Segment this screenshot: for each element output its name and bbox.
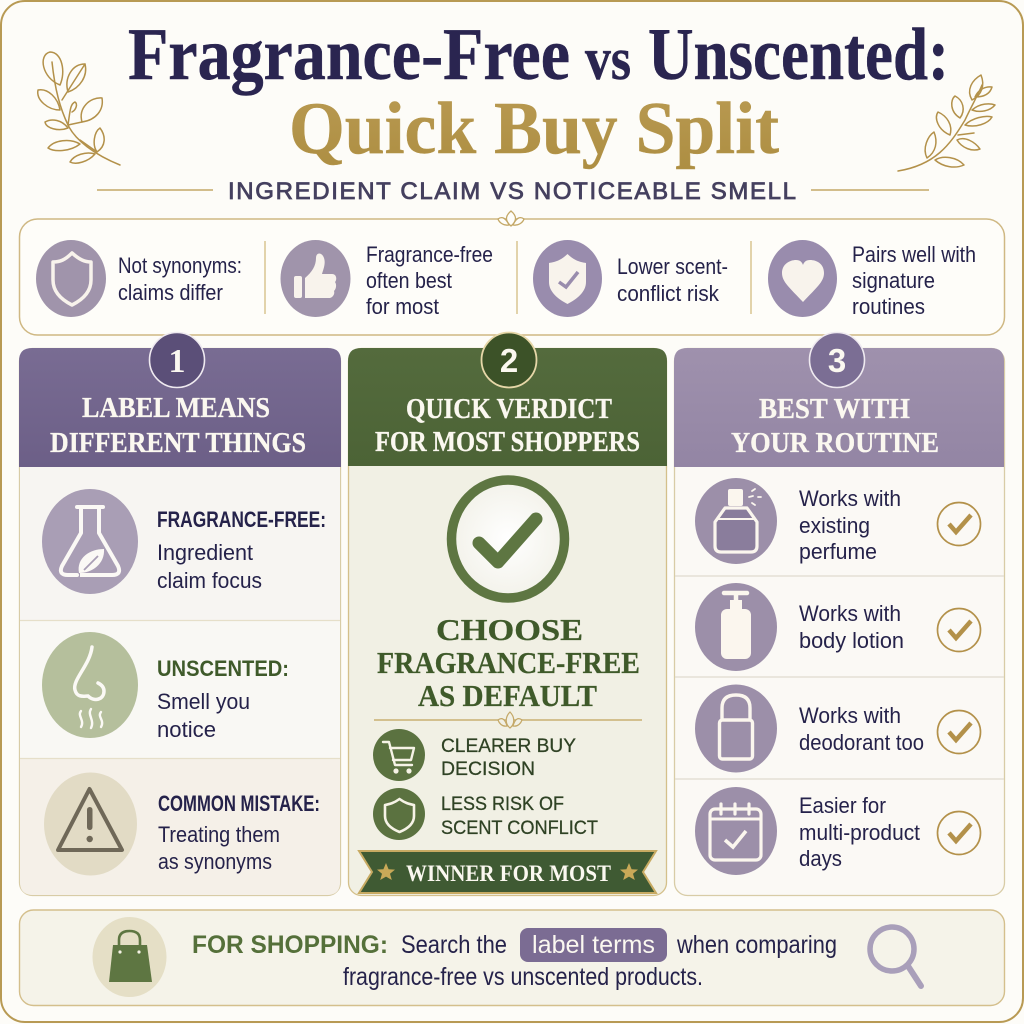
row: unscented: UNSCENTED:	[157, 656, 289, 681]
row: unscented: notice	[157, 717, 216, 742]
title line 1: Unscented:	[648, 14, 949, 96]
check mark	[938, 502, 980, 546]
column 3 header	[674, 348, 1004, 467]
row backgrounds	[20, 467, 340, 895]
icon: left laurel sprig	[38, 52, 120, 165]
row: perfume: perfume	[799, 539, 877, 564]
item: pairs well: routines	[852, 294, 925, 319]
item: often best: Fragrance-free	[366, 242, 493, 267]
row: perfume: Works with	[799, 486, 901, 511]
verdict headline: CHOOSE	[436, 612, 583, 647]
tip text: fragrance-free vs unscented products.	[343, 963, 703, 991]
item: pairs well: Pairs well with	[852, 242, 976, 267]
verdict headline: FRAGRANCE-FREE	[377, 645, 640, 680]
icon: shopping bag	[92, 917, 166, 997]
row: fragrance-free: claim focus	[157, 568, 262, 593]
column 2 header: FOR MOST SHOPPERS	[375, 427, 640, 458]
benefit: less risk	[373, 788, 598, 840]
row: multi-product	[695, 787, 980, 875]
column 1 header	[19, 348, 341, 467]
row: fragrance-free: Ingredient	[157, 540, 253, 565]
row: multi-product: days	[799, 846, 842, 871]
item: often best: for most	[366, 294, 439, 319]
ornament divider	[374, 712, 642, 728]
benefit: less risk: LESS RISK OF	[441, 794, 564, 815]
header block	[97, 14, 949, 205]
row: unscented: Smell you	[157, 689, 250, 714]
row: multi-product: multi-product	[799, 820, 920, 845]
title line 1: Fragrance-Free	[128, 14, 570, 96]
icon: large check circle	[452, 480, 564, 598]
panel: shopping tip	[20, 910, 1004, 1006]
winner ribbon: WINNER FOR MOST	[406, 861, 611, 886]
item: not synonyms: Not synonyms:	[118, 253, 242, 278]
verdict headline	[377, 612, 640, 713]
number badge 1	[150, 332, 204, 388]
item: lower risk	[533, 240, 728, 317]
column 3 header: YOUR ROUTINE	[731, 428, 939, 459]
panel: column 3 routine	[674, 332, 1004, 896]
column 1 header: DIFFERENT THINGS	[50, 428, 306, 459]
verdict headline: AS DEFAULT	[418, 678, 597, 713]
item: not synonyms: claims differ	[118, 280, 223, 305]
benefit: clearer decision	[373, 729, 576, 781]
item: lower risk: conflict risk	[617, 281, 720, 306]
column 1 header: LABEL MEANS	[82, 393, 270, 424]
panel: key points strip	[20, 211, 1004, 335]
row: common mistake: COMMON MISTAKE:	[158, 791, 320, 816]
tip text: Search the	[401, 931, 507, 959]
panel: column 1 label meanings	[19, 332, 341, 896]
winner ribbon	[359, 851, 656, 893]
title line 1	[128, 14, 949, 96]
panel: column 2 quick verdict	[348, 332, 667, 896]
tip text: FOR SHOPPING:	[192, 931, 388, 959]
row: common mistake: as synonyms	[158, 849, 272, 874]
highlight pill: label terms	[532, 931, 655, 959]
row: unscented	[42, 632, 289, 742]
row: lotion: Works with	[799, 601, 901, 626]
check mark	[938, 710, 980, 754]
icon: perfume bottle	[695, 478, 777, 564]
row: fragrance-free	[42, 489, 326, 594]
dividers	[265, 241, 751, 314]
icon: calendar	[695, 787, 777, 875]
item: not synonyms	[36, 240, 242, 317]
row: fragrance-free: FRAGRANCE-FREE:	[157, 507, 326, 532]
item: often best: often best	[366, 268, 452, 293]
item: pairs well	[768, 240, 976, 319]
highlight pill	[520, 928, 667, 962]
number badge 1: 1	[168, 343, 186, 380]
number badge 2	[482, 332, 536, 388]
tip text: when comparing	[676, 931, 837, 959]
icon: magnifier	[870, 927, 921, 986]
title line 1: vs	[585, 26, 631, 92]
tip text	[192, 928, 837, 991]
subtitle: INGREDIENT CLAIM VS NOTICEABLE SMELL	[228, 178, 796, 205]
ornament	[498, 211, 524, 226]
icon: deodorant stick	[695, 684, 777, 772]
row: deodorant	[695, 684, 980, 772]
title line 2: Quick Buy Split	[289, 88, 779, 170]
row: common mistake: Treating them	[158, 822, 280, 847]
number badge 3	[810, 332, 864, 388]
number badge 2: 2	[500, 342, 518, 379]
icon: right laurel sprig	[898, 75, 995, 171]
check mark	[938, 608, 980, 652]
row: lotion: body lotion	[799, 628, 904, 653]
subtitle rules	[97, 189, 929, 191]
row: multi-product: Easier for	[799, 793, 886, 818]
row: deodorant: deodorant too	[799, 730, 924, 755]
benefit: clearer decision: CLEARER BUY	[441, 736, 576, 757]
icon: warning triangle	[44, 772, 137, 876]
column 3 header: BEST WITH	[759, 394, 910, 425]
item: lower risk: Lower scent-	[617, 254, 728, 279]
benefit: clearer decision: DECISION	[441, 759, 535, 780]
icon: flask with leaf	[42, 489, 138, 594]
item: pairs well: signature	[852, 268, 935, 293]
icon: nose with scent	[42, 632, 138, 738]
column 2 header: QUICK VERDICT	[406, 394, 612, 425]
benefit: less risk: SCENT CONFLICT	[441, 818, 598, 839]
row: deodorant: Works with	[799, 703, 901, 728]
row: perfume	[695, 478, 980, 564]
item: often best	[280, 240, 493, 319]
row: perfume: existing	[799, 513, 870, 538]
icon: lotion pump	[695, 583, 777, 671]
row: common mistake	[44, 772, 320, 876]
row dividers	[675, 576, 1004, 779]
check mark	[938, 812, 980, 854]
column 2 header	[348, 348, 667, 466]
number badge 3: 3	[828, 342, 846, 379]
row: lotion	[695, 583, 980, 671]
